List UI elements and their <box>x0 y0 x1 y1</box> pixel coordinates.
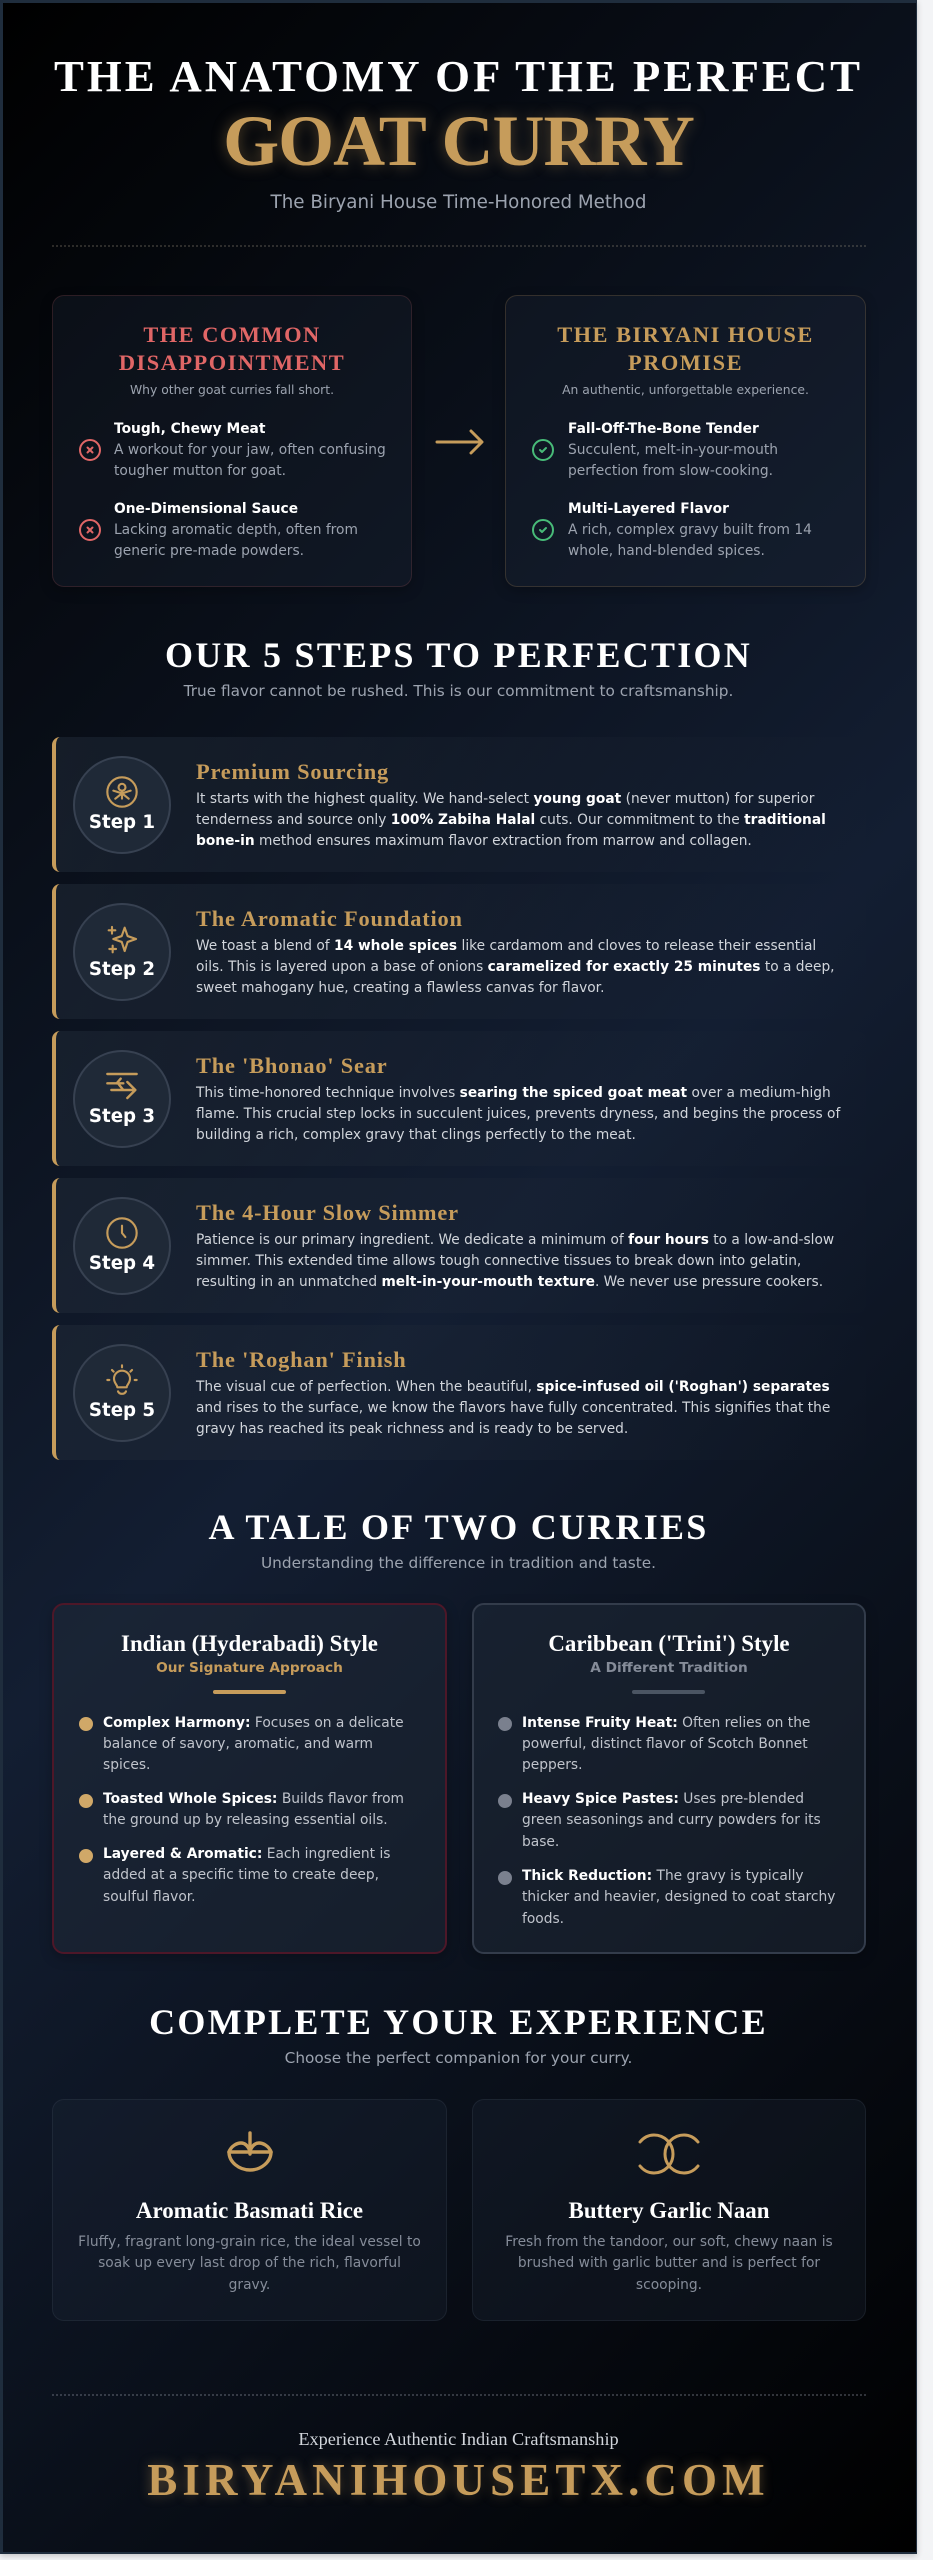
subheading: experience: Choose the perfect companion for your curry. <box>285 2049 632 2067</box>
icon: sourcing seal <box>106 776 138 808</box>
card subtitle: A Different Tradition <box>590 1660 748 1676</box>
step 3 title: The 'Bhonao' Sear <box>196 1053 388 1078</box>
bullet <box>79 1849 93 1863</box>
subtitle: The Biryani House Time-Honored Method <box>271 192 646 212</box>
step 2 text <box>196 938 835 996</box>
step 5 text: The visual cue of perfection. When the beautiful, spice-infused oil ('Roghan') separates <box>196 1378 830 1394</box>
point: heavy spice pastes: green seasonings and curry powders for its <box>522 1812 821 1828</box>
bullet <box>498 1794 512 1808</box>
item: fall-off-the-bone tender: perfection from slow-cooking. <box>568 463 773 479</box>
step 3 badge: Step 3 <box>89 1106 155 1127</box>
panel: common disappointment <box>52 295 412 587</box>
card text: Fresh from the tandoor, our soft, chewy naan is <box>505 2234 833 2250</box>
panel: indian hyderabadi style <box>52 1603 447 1954</box>
item: fall-off-the-bone tender: Succulent, melt-in-your-mouth <box>568 442 778 458</box>
step 5 text: and rises to the surface, we know the flavors have fully concentrated. This signifies that the <box>196 1400 830 1416</box>
panel subheading: Why other goat curries fall short. <box>130 382 334 396</box>
item: one-dimensional sauce: Lacking aromatic depth, often from <box>114 522 358 538</box>
point: toasted whole spices: the ground up by releasing essential oils. <box>103 1812 388 1828</box>
item: one-dimensional sauce: One-Dimensional Sauce <box>114 500 298 516</box>
step 1 text: tenderness and source only 100% Zabiha Halal cuts. Our commitment to the traditional <box>196 812 826 828</box>
step 3 text: This time-honored technique involves searing the spiced goat meat over a medium-high <box>196 1084 831 1100</box>
step 1 card <box>52 737 866 872</box>
step 5 badge: Step 5 <box>89 1400 155 1421</box>
point: complex harmony: balance of savory, aromatic, and warm <box>103 1736 373 1752</box>
point: thick reduction: thicker and heavier, designed to coat starchy <box>522 1889 835 1905</box>
item: one-dimensional sauce: generic pre-made powders. <box>114 543 304 559</box>
icon: clock <box>106 1217 138 1249</box>
point: heavy spice pastes: base. <box>522 1834 559 1850</box>
point: thick reduction <box>522 1868 835 1927</box>
step 4 badge <box>73 1197 171 1295</box>
icon: naan <box>638 2134 700 2174</box>
point: intense fruity heat: peppers. <box>522 1757 582 1773</box>
card title: Buttery Garlic Naan <box>569 2198 769 2223</box>
step 2 title: The Aromatic Foundation <box>196 906 463 931</box>
bullet <box>498 1871 512 1885</box>
icon: check circle <box>532 519 554 541</box>
card title: Caribbean ('Trini') Style <box>548 1631 790 1656</box>
step 3 text: flame. This crucial step locks in succulent juices, prevents dryness, and begins the process of <box>196 1106 840 1122</box>
step 4 text: Patience is our primary ingredient. We dedicate a minimum of four hours to a low-and-slow <box>196 1232 834 1248</box>
panel: caribbean trini style <box>472 1603 866 1954</box>
icon: sparkles <box>108 926 138 954</box>
step 4 text <box>196 1232 834 1290</box>
heading: our 5 steps: OUR 5 STEPS TO PERFECTION <box>165 635 752 675</box>
title: goat curry: GOAT CURRY <box>223 101 694 181</box>
subheading: curries: Understanding the difference in tradition and taste. <box>261 1554 656 1572</box>
icon: light bulb <box>106 1364 138 1395</box>
point: toasted whole spices <box>103 1791 404 1828</box>
step 5 title: The 'Roghan' Finish <box>196 1347 407 1372</box>
point: toasted whole spices: Toasted Whole Spices: Builds flavor from <box>103 1791 404 1807</box>
point: layered and aromatic: Layered & Aromatic: Each ingredient is <box>103 1846 390 1862</box>
point: heavy spice pastes <box>522 1791 821 1850</box>
heading: a tale of two curries: A TALE OF TWO CURRIES <box>208 1507 709 1547</box>
step 5 card <box>52 1325 866 1460</box>
step 4 text: resulting in an unmatched melt-in-your-mouth texture. We never use pressure cookers. <box>196 1274 823 1290</box>
card subtitle: Our Signature Approach <box>156 1660 343 1676</box>
card text: soak up every last drop of the rich, flavorful <box>98 2255 401 2271</box>
panel: garlic naan <box>472 2099 866 2321</box>
panel heading <box>119 322 345 374</box>
step 4 card <box>52 1178 866 1313</box>
point: heavy spice pastes: Heavy Spice Pastes: Uses pre-blended <box>522 1791 804 1807</box>
step 3 card <box>52 1031 866 1166</box>
step 2 badge: Step 2 <box>89 959 155 980</box>
step 5 text <box>196 1378 830 1437</box>
point: layered and aromatic: soulful flavor. <box>103 1889 196 1905</box>
step 1 text: bone-in method ensures maximum flavor extraction from marrow and collagen. <box>196 833 752 849</box>
item: multi-layered flavor: whole, hand-blended spices. <box>568 543 765 559</box>
item: multi-layered flavor <box>568 500 812 559</box>
panel heading: THE BIRYANI HOUSE <box>557 322 814 347</box>
point: complex harmony: Complex Harmony: Focuses on a delicate <box>103 1714 404 1730</box>
panel: biryani house promise <box>505 295 866 587</box>
bullet <box>79 1717 93 1731</box>
point: intense fruity heat: powerful, distinct flavor of Scotch Bonnet <box>522 1736 808 1752</box>
subheading: steps: True flavor cannot be rushed. This is our commitment to craftsmanship. <box>184 682 733 700</box>
step 1 badge <box>73 756 171 854</box>
step 1 title: Premium Sourcing <box>196 759 389 784</box>
step 2 text: oils. This is layered upon a base of onions caramelized for exactly 25 minutes to a deep, <box>196 959 835 975</box>
card text: brushed with garlic butter and is perfect for <box>518 2255 820 2271</box>
step 5 text: gravy has reached its peak richness and is ready to be served. <box>196 1421 628 1437</box>
title: the anatomy of the perfect: THE ANATOMY OF THE PERFECT <box>54 50 863 100</box>
point: intense fruity heat: Intense Fruity Heat: Often relies on the <box>522 1714 810 1730</box>
card text <box>78 2234 421 2293</box>
item: fall-off-the-bone tender: Fall-Off-The-Bone Tender <box>568 420 759 436</box>
step 1 text: It starts with the highest quality. We hand-select young goat (never mutton) for superior <box>196 790 814 806</box>
heading: complete your experience: COMPLETE YOUR EXPERIENCE <box>149 2002 768 2042</box>
item: tough chewy meat: A workout for your jaw, often confusing <box>114 442 386 458</box>
item: fall-off-the-bone tender <box>568 420 778 479</box>
card text: gravy. <box>229 2277 270 2293</box>
panel heading: DISAPPOINTMENT <box>119 350 345 374</box>
step 4 badge: Step 4 <box>89 1253 155 1274</box>
item: one-dimensional sauce <box>114 500 358 559</box>
item: tough chewy meat <box>114 420 386 479</box>
item: multi-layered flavor: Multi-Layered Flavor <box>568 500 729 516</box>
point: thick reduction: foods. <box>522 1911 564 1927</box>
step 3 text <box>196 1084 841 1143</box>
step 4 title: The 4-Hour Slow Simmer <box>196 1200 459 1225</box>
step 2 text: sweet mahogany hue, creating a flawless canvas for flavor. <box>196 980 604 996</box>
card title: Aromatic Basmati Rice <box>136 2198 363 2223</box>
panel subheading: An authentic, unforgettable experience. <box>562 382 809 396</box>
icon: x circle <box>79 519 101 541</box>
step 3 badge <box>73 1050 171 1148</box>
card title: Indian (Hyderabadi) Style <box>121 1631 378 1656</box>
item: multi-layered flavor: A rich, complex gravy built from 14 <box>568 522 812 538</box>
item: tough chewy meat: tougher mutton for goat. <box>114 463 286 479</box>
footer tagline: Experience Authentic Indian Craftsmanship <box>298 2429 619 2449</box>
step 2 card <box>52 884 866 1019</box>
point: complex harmony: spices. <box>103 1757 150 1773</box>
icon: check circle <box>532 439 554 461</box>
card text: Fluffy, fragrant long-grain rice, the ideal vessel to <box>78 2234 421 2250</box>
panel heading: PROMISE <box>628 350 743 374</box>
footer website: BIRYANIHOUSETX.COM <box>147 2455 770 2505</box>
panel: basmati rice <box>52 2099 447 2321</box>
bullet <box>79 1794 93 1808</box>
step 3 text: building a rich, complex gravy that clings perfectly to the meat. <box>196 1127 636 1143</box>
arrow: from disappointment to promise <box>436 429 484 455</box>
card text <box>505 2234 833 2293</box>
panel heading: THE COMMON <box>143 322 321 347</box>
point: thick reduction: Thick Reduction: The gravy is typically <box>522 1868 804 1884</box>
card text: scooping. <box>636 2277 702 2293</box>
bullet <box>498 1717 512 1731</box>
step 4 text: simmer. This extended time allows tough connective tissues to break down into gelatin, <box>196 1253 801 1269</box>
icon: x circle <box>79 439 101 461</box>
icon: sear <box>106 1072 138 1100</box>
icon: rice bowl <box>227 2131 273 2172</box>
point: intense fruity heat <box>522 1714 810 1773</box>
point: layered and aromatic: added at a specific time to create deep, <box>103 1867 379 1883</box>
step 1 badge: Step 1 <box>89 812 155 833</box>
point: layered and aromatic <box>103 1846 390 1905</box>
step 2 text: We toast a blend of 14 whole spices like cardamom and cloves to release their essential <box>196 938 816 954</box>
step 5 badge <box>73 1344 171 1442</box>
step 1 text <box>196 790 826 849</box>
item: tough chewy meat: Tough, Chewy Meat <box>114 420 265 436</box>
step 2 badge <box>73 903 171 1001</box>
point: complex harmony <box>103 1714 404 1773</box>
panel heading <box>557 322 814 374</box>
